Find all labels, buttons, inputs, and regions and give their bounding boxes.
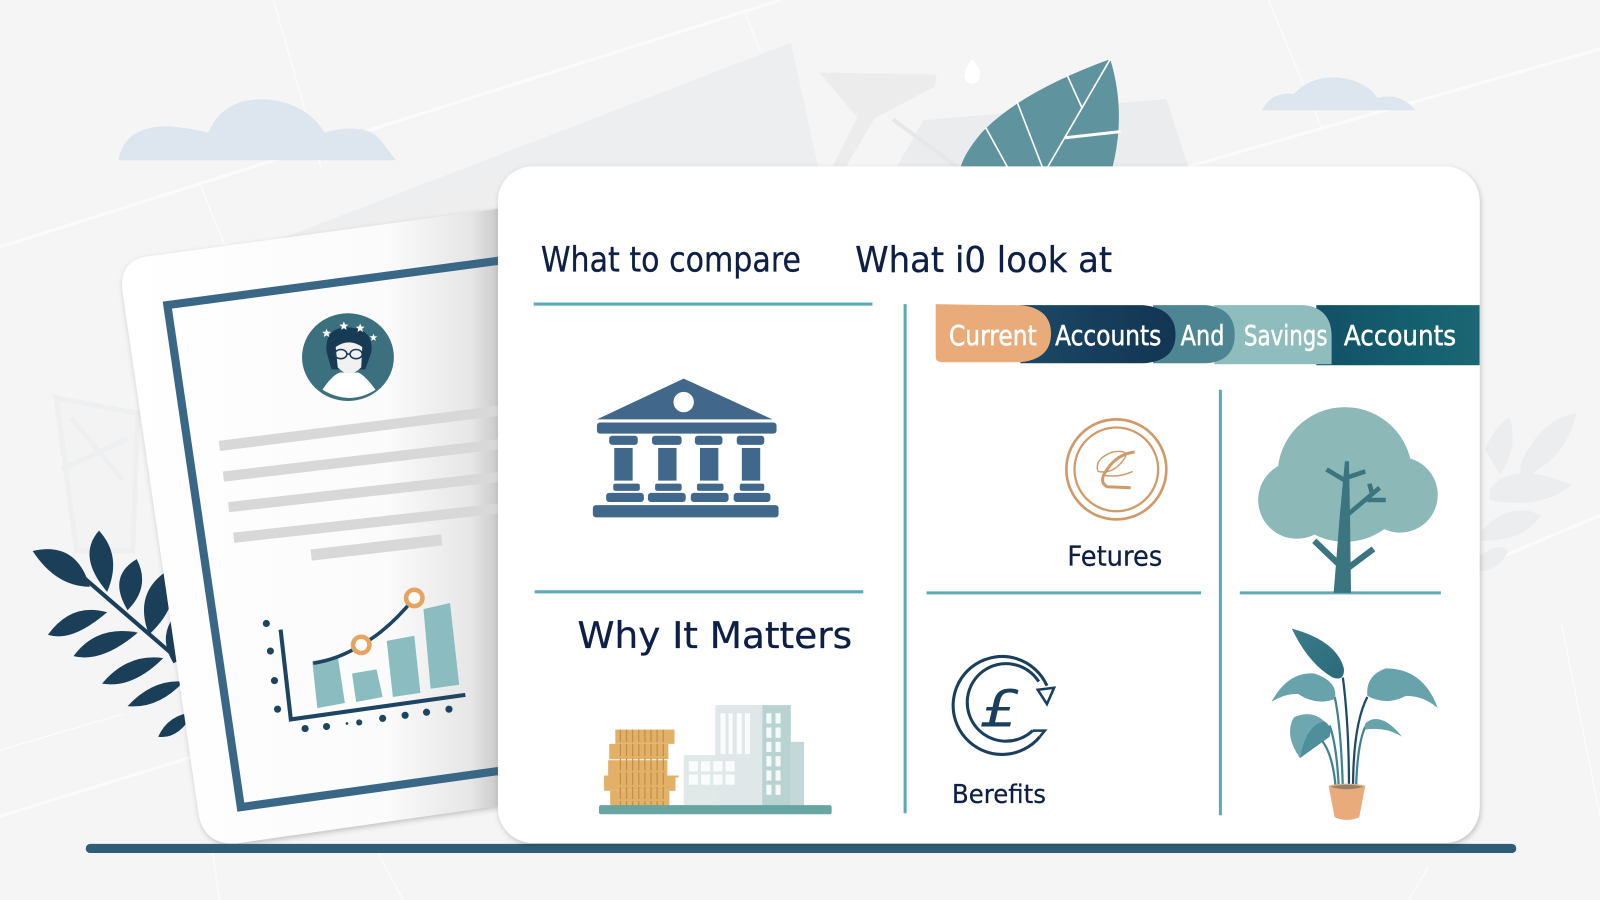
- heading: why it matters: Why It Matters: [578, 614, 852, 657]
- banner: current accounts and savings accounts: And: [1181, 320, 1224, 352]
- icon: pound cycle: [953, 656, 1054, 754]
- panel: tilted document: [122, 207, 510, 843]
- illustration: coins and buildings: [599, 705, 832, 814]
- document blue frame: [167, 259, 510, 807]
- avatar: [302, 313, 394, 401]
- heading: what to compare: What to compare: [541, 240, 801, 280]
- document text lines: [219, 409, 510, 555]
- icon: potted plant: [1271, 629, 1438, 820]
- icon: tree: [1258, 407, 1438, 593]
- chart in document: [263, 590, 465, 732]
- pound sign: £: [980, 681, 1019, 740]
- dividers: [534, 304, 1441, 815]
- banner: current accounts and savings accounts: Accounts: [1344, 320, 1456, 352]
- heading: what to look at: What i0 look at: [855, 240, 1112, 281]
- label: features: Fetures: [1067, 540, 1162, 572]
- banner: current accounts and savings accounts: [936, 304, 1480, 365]
- cloud: right: [1262, 77, 1415, 110]
- banner: current accounts and savings accounts: Accounts: [1055, 320, 1161, 352]
- cloud: left: [118, 99, 396, 160]
- banner: current accounts and savings accounts: Savings: [1244, 320, 1328, 352]
- base line: [86, 844, 1516, 853]
- icon: bank: [593, 379, 779, 517]
- icon: teal leaf behind card: [960, 59, 1120, 168]
- banner: current accounts and savings accounts: Current: [949, 320, 1037, 352]
- label: benefits: Berefits: [952, 780, 1046, 810]
- panel: main card: [498, 166, 1480, 843]
- icon: dark branch: [33, 531, 194, 737]
- icon: coin: [1066, 419, 1166, 519]
